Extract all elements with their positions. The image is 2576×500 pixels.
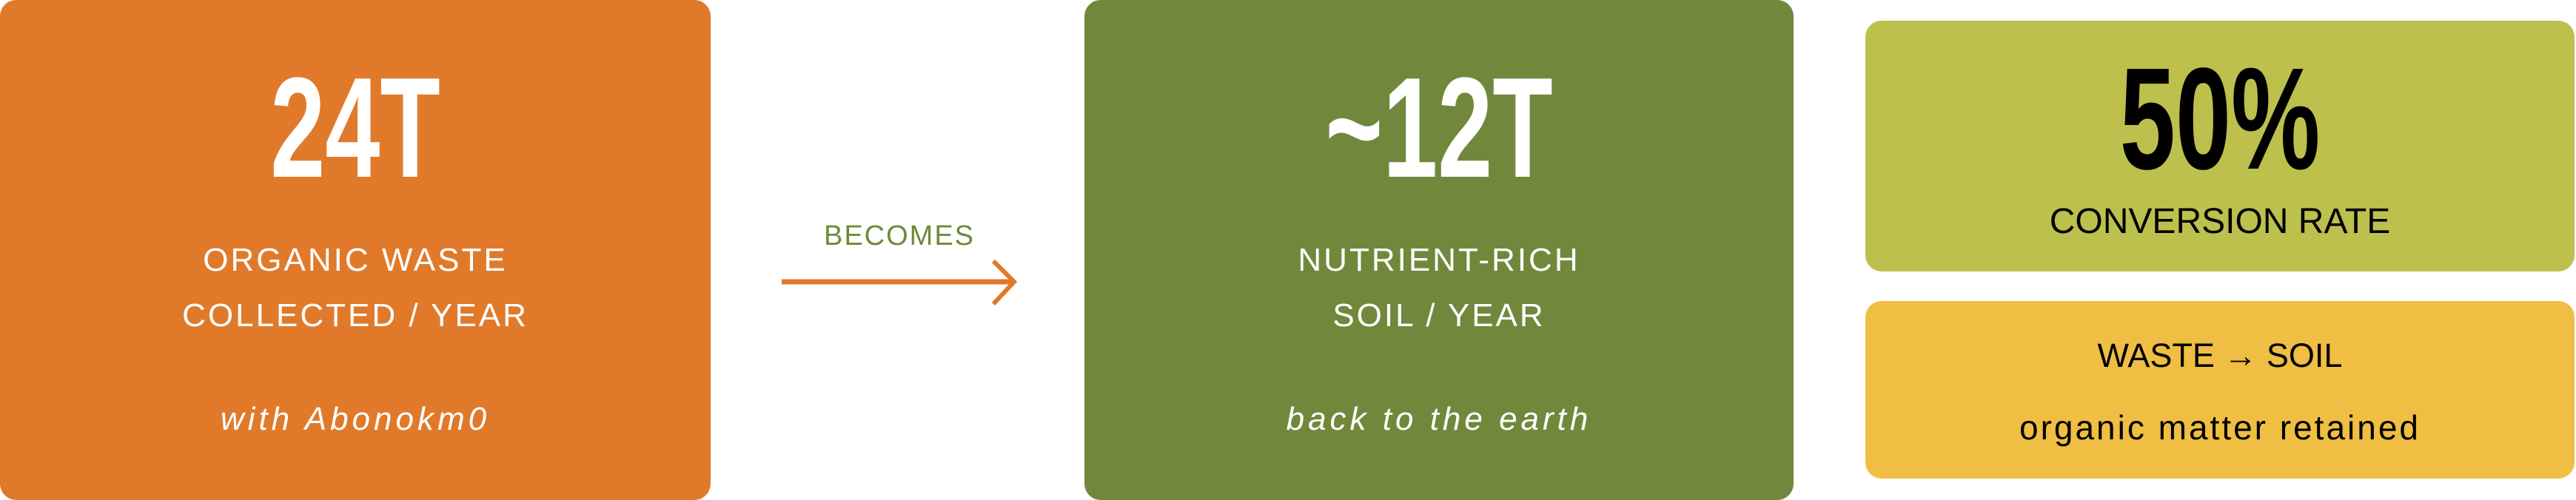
label: organic waste collected: ORGANIC WASTE [203, 242, 508, 278]
panel: conversion rate [1865, 21, 2575, 271]
stat: ~12T: ~12T [1325, 47, 1553, 207]
label: becomes: BECOMES [824, 220, 975, 251]
stat: 24T: 24T [270, 47, 440, 207]
panel: organic waste [0, 0, 711, 500]
label line 2: COLLECTED / YEAR [182, 297, 529, 334]
note: organic matter retained: organic matter retained [2019, 408, 2421, 447]
stat: 50%: 50% [2120, 38, 2320, 200]
panel: soil [1084, 0, 1794, 500]
label line 2: SOIL / YEAR [1332, 297, 1546, 334]
note: with Abonokm0: with Abonokm0 [221, 401, 490, 437]
label: nutrient-rich: NUTRIENT-RICH [1298, 242, 1580, 278]
label: conversion rate: CONVERSION RATE [2050, 202, 2390, 241]
arrow [782, 259, 1017, 305]
panel: waste to soil [1865, 301, 2575, 479]
label: waste to soil: WASTE → SOIL [2098, 337, 2342, 374]
note: back to the earth: back to the earth [1287, 401, 1591, 437]
